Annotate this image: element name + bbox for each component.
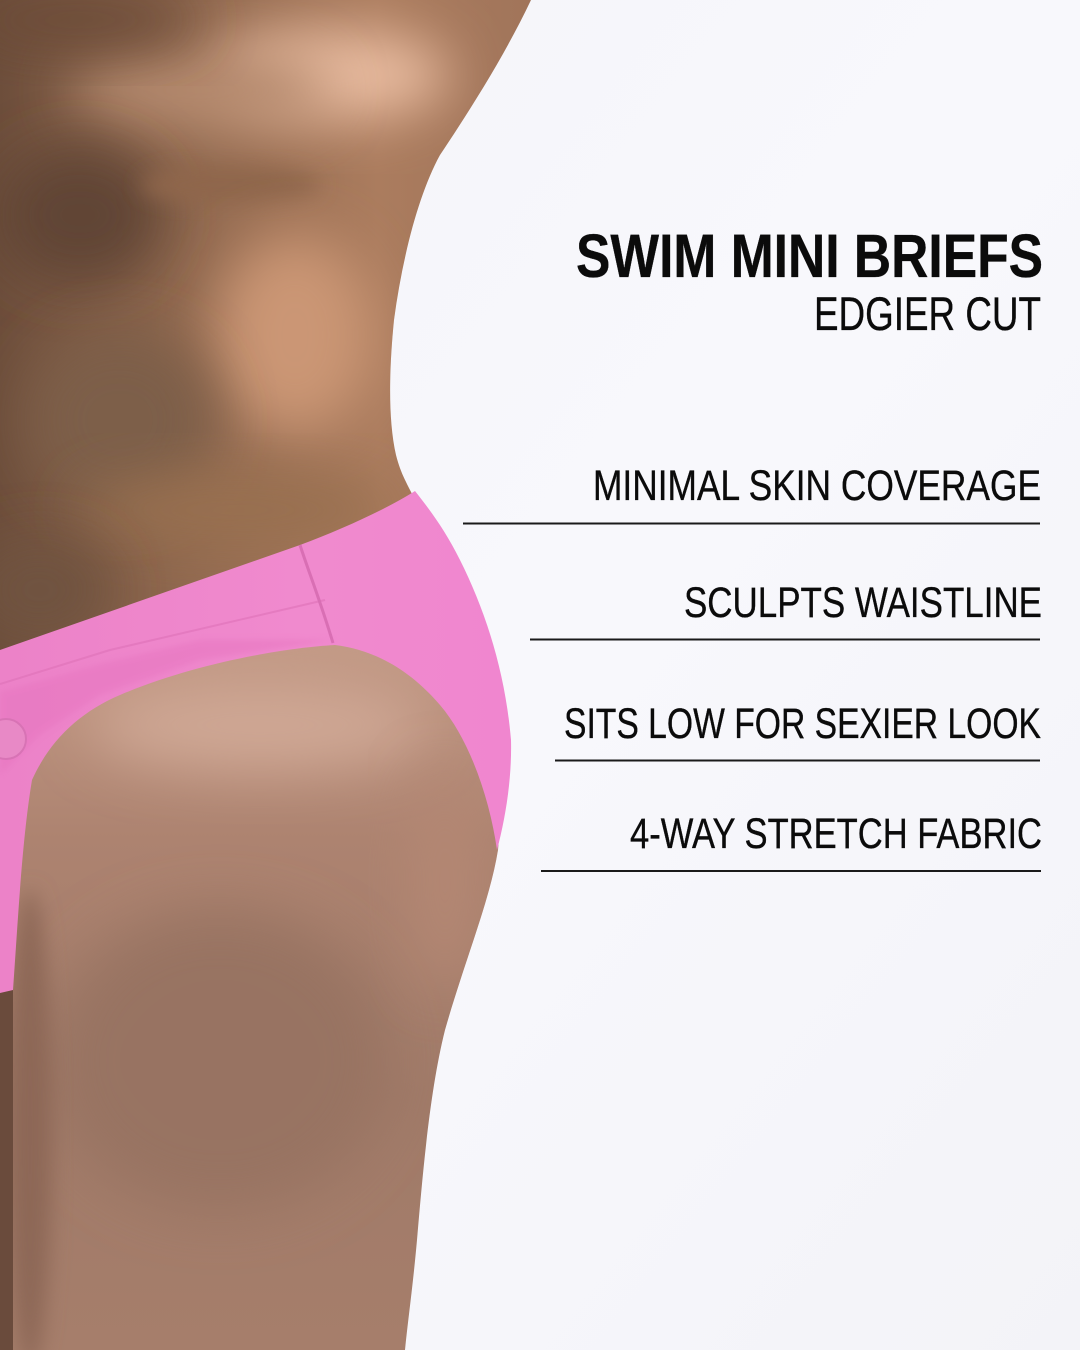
photo: swim briefs	[0, 491, 511, 993]
photo: thigh	[0, 620, 520, 1350]
photo: torso	[0, 0, 540, 700]
photo: dark area at left below briefs	[0, 990, 13, 1350]
icon: button	[0, 719, 26, 759]
